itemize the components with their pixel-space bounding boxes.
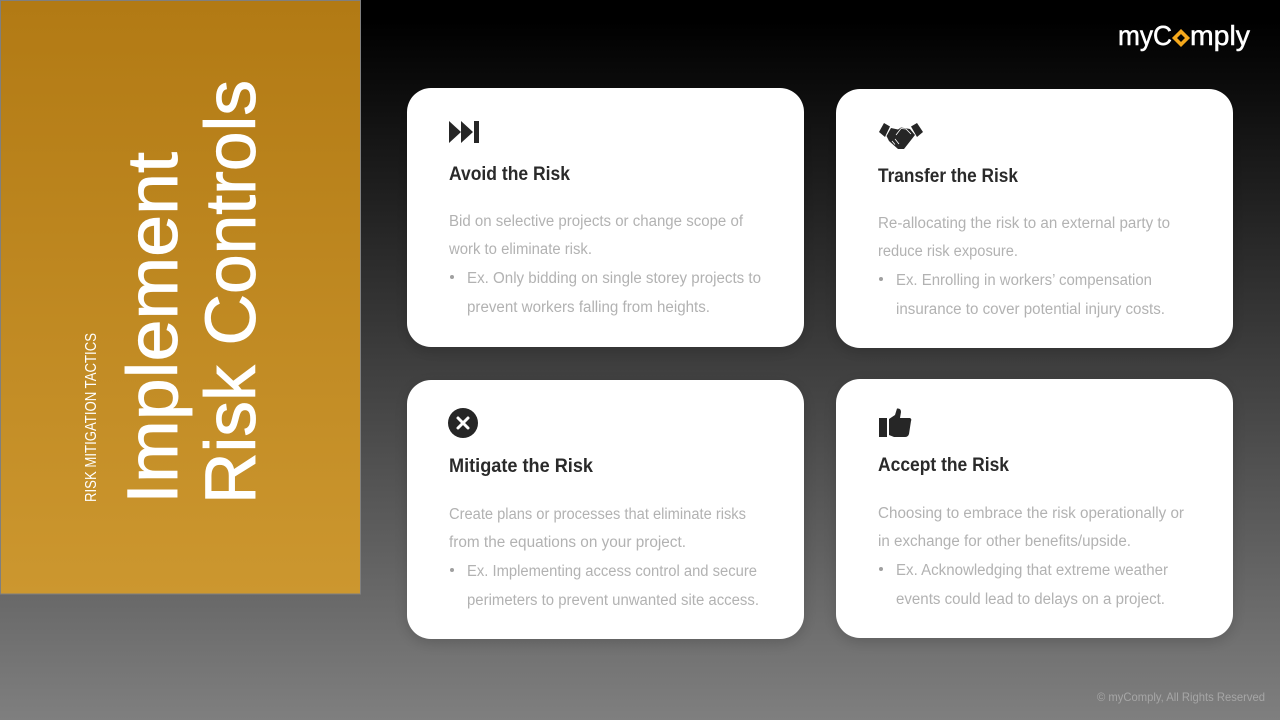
body text: Ex. Acknowledging that extreme weather [896,562,1168,579]
body text: from the equations on your project. [449,534,686,551]
footer copyright: © myComply, All Rights Reserved [1097,690,1265,704]
body text: Re-allocating the risk to an external party to [878,215,1170,232]
logo: myComply: myC [1118,20,1172,51]
body text: Ex. Implementing access control and secure [467,563,757,580]
title: Implement [114,152,193,504]
body text: insurance to cover potential injury costs. [896,301,1165,318]
heading: Mitigate the Risk [449,456,593,477]
body text: Choosing to embrace the risk operationally or [878,505,1184,522]
icon: x circle [448,408,478,438]
body text: Create plans or processes that eliminate risks [449,506,746,523]
card: Mitigate the Risk [407,380,804,639]
card: Accept the Risk [836,379,1233,638]
body text [878,215,1170,318]
body text: prevent workers falling from heights. [467,299,710,316]
body text: in exchange for other benefits/upside. [878,533,1131,550]
heading: Transfer the Risk [878,166,1018,187]
title: Risk Controls [192,80,271,504]
body text: Ex. Only bidding on single storey projects to [467,270,761,287]
body text: Ex. Enrolling in workers’ compensation [896,272,1152,289]
body text [448,213,761,316]
icon: fast forward [449,121,479,143]
body text: work to eliminate risk. [448,241,592,258]
body text [449,506,759,609]
panel: title sidebar [0,0,360,594]
subtitle: RISK MITIGATION TACTICS [83,333,100,502]
heading: Avoid the Risk [449,164,570,185]
title [114,80,271,504]
card: Avoid the Risk [407,88,804,347]
body text: reduce risk exposure. [878,243,1018,260]
body text: Bid on selective projects or change scope of [449,213,744,230]
logo: myComply [1118,20,1250,51]
body text: perimeters to prevent unwanted site access. [467,592,759,609]
heading: Accept the Risk [878,455,1009,476]
logo: myComply: mply [1190,20,1250,51]
card: Transfer the Risk [836,89,1233,348]
body text [878,505,1184,608]
icon: handshake [879,123,923,149]
icon: thumbs up [879,408,911,437]
body text: events could lead to delays on a project. [896,591,1165,608]
